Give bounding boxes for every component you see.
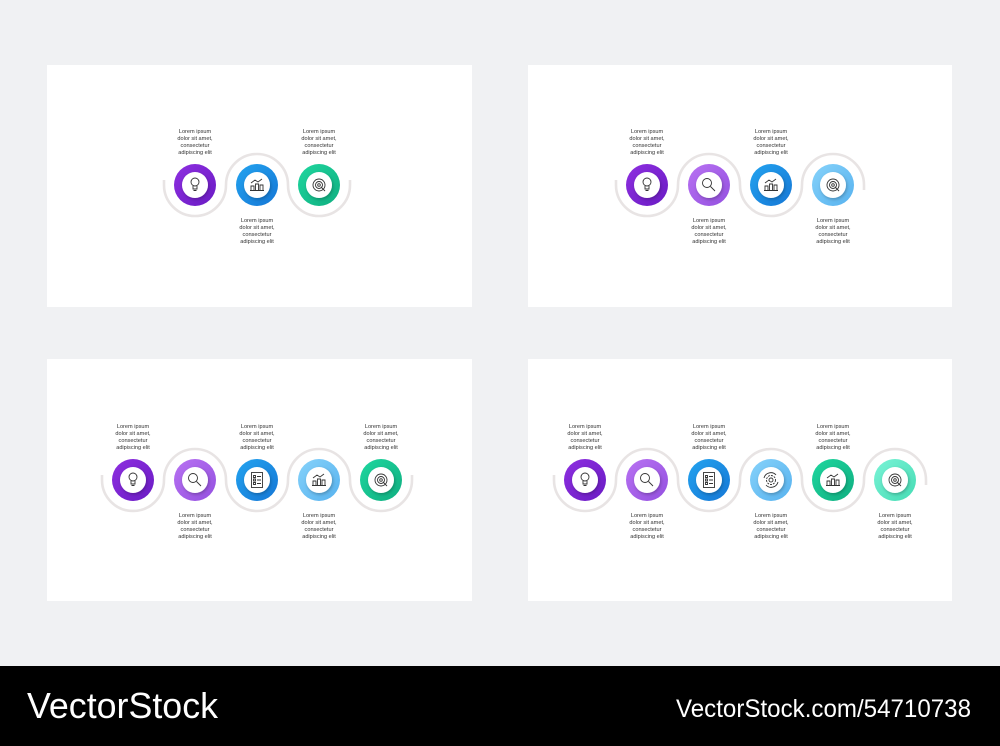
text 3: adipiscing elit [692,445,726,451]
panel: five steps [47,359,472,601]
text 4: consectetur [757,527,786,533]
text 5: dolor sit amet, [363,431,399,437]
panel: three steps [47,65,472,307]
step 1 circle: idea [112,459,154,501]
text 3 [239,424,275,451]
text 3: consectetur [695,438,724,444]
footer url text: VectorStock.com/54710738 [676,695,971,723]
text 2: dolor sit amet, [177,520,213,526]
text 1: adipiscing elit [178,150,212,156]
step 1 circle: idea [174,164,216,206]
text 3 [691,424,727,451]
text 1: adipiscing elit [568,445,602,451]
text 6: Lorem ipsum [879,513,911,519]
text 3: dolor sit amet, [691,431,727,437]
text 1: dolor sit amet, [567,431,603,437]
text 1 [567,424,603,451]
text 4: consectetur [305,527,334,533]
text 3: dolor sit amet, [239,431,275,437]
text 4 [301,513,337,540]
text 5: Lorem ipsum [365,424,397,430]
text 6: adipiscing elit [878,534,912,540]
text 3: adipiscing elit [754,150,788,156]
text 2: adipiscing elit [692,239,726,245]
text 2: adipiscing elit [240,239,274,245]
step 2 circle: search [174,459,216,501]
text 5 [815,424,851,451]
text 5 [363,424,399,451]
text 4: dolor sit amet, [301,520,337,526]
text 4: dolor sit amet, [753,520,789,526]
step 5 circle: chart [812,459,854,501]
text 1: dolor sit amet, [177,136,213,142]
text 1: Lorem ipsum [569,424,601,430]
text 2: adipiscing elit [178,534,212,540]
text 5: adipiscing elit [816,445,850,451]
text 2: Lorem ipsum [241,218,273,224]
step 4 circle: chart [298,459,340,501]
text 4: Lorem ipsum [303,513,335,519]
text 1 [629,129,665,156]
text 2: adipiscing elit [630,534,664,540]
step 3 circle: target [298,164,340,206]
text 1 [115,424,151,451]
panel: six steps [528,359,952,601]
text 4: adipiscing elit [754,534,788,540]
step 2 circle: search [688,164,730,206]
text 5: consectetur [367,438,396,444]
footer bar [0,666,1000,746]
text 3: consectetur [243,438,272,444]
text 1: dolor sit amet, [115,431,151,437]
text 1: consectetur [119,438,148,444]
step 4 circle: target [812,164,854,206]
text 4: consectetur [819,232,848,238]
text 1: consectetur [571,438,600,444]
text 2: consectetur [243,232,272,238]
text 2: Lorem ipsum [631,513,663,519]
step 3 circle: checklist [236,459,278,501]
text 1: consectetur [633,143,662,149]
text 3: Lorem ipsum [241,424,273,430]
step 5 circle: target [360,459,402,501]
step 2 circle: chart [236,164,278,206]
step 6 circle: target [874,459,916,501]
text 1: adipiscing elit [630,150,664,156]
step 3 circle: chart [750,164,792,206]
text 2: dolor sit amet, [239,225,275,231]
step 1 circle: idea [626,164,668,206]
text 5: Lorem ipsum [817,424,849,430]
text 3 [301,129,337,156]
text 3: consectetur [757,143,786,149]
text 3: adipiscing elit [240,445,274,451]
text 1: Lorem ipsum [117,424,149,430]
text 1: dolor sit amet, [629,136,665,142]
text 5: consectetur [819,438,848,444]
text 4: Lorem ipsum [755,513,787,519]
text 3: Lorem ipsum [755,129,787,135]
text 3: dolor sit amet, [753,136,789,142]
footer logo text: VectorStock [27,685,219,726]
text 5: dolor sit amet, [815,431,851,437]
step 1 circle: idea [564,459,606,501]
text 1: adipiscing elit [116,445,150,451]
text 2 [629,513,665,540]
text 6: consectetur [881,527,910,533]
text 2: Lorem ipsum [179,513,211,519]
text 1: consectetur [181,143,210,149]
step 2 circle: search [626,459,668,501]
text 4: adipiscing elit [302,534,336,540]
text 1: Lorem ipsum [631,129,663,135]
text 4: adipiscing elit [816,239,850,245]
text 4: Lorem ipsum [817,218,849,224]
text 4 [815,218,851,245]
text 3: dolor sit amet, [301,136,337,142]
text 2: consectetur [695,232,724,238]
text 1 [177,129,213,156]
text 3: consectetur [305,143,334,149]
text 1: Lorem ipsum [179,129,211,135]
text 3: adipiscing elit [302,150,336,156]
text 2: consectetur [633,527,662,533]
text 6 [877,513,913,540]
text 2: dolor sit amet, [629,520,665,526]
text 4: dolor sit amet, [815,225,851,231]
text 3 [753,129,789,156]
text 2: Lorem ipsum [693,218,725,224]
text 3: Lorem ipsum [693,424,725,430]
text 2 [177,513,213,540]
text 5: adipiscing elit [364,445,398,451]
panel: four steps [528,65,952,307]
text 2 [691,218,727,245]
step 4 circle: gear [750,459,792,501]
text 6: dolor sit amet, [877,520,913,526]
step 3 circle: checklist [688,459,730,501]
text 2: dolor sit amet, [691,225,727,231]
text 2 [239,218,275,245]
text 3: Lorem ipsum [303,129,335,135]
text 4 [753,513,789,540]
text 2: consectetur [181,527,210,533]
